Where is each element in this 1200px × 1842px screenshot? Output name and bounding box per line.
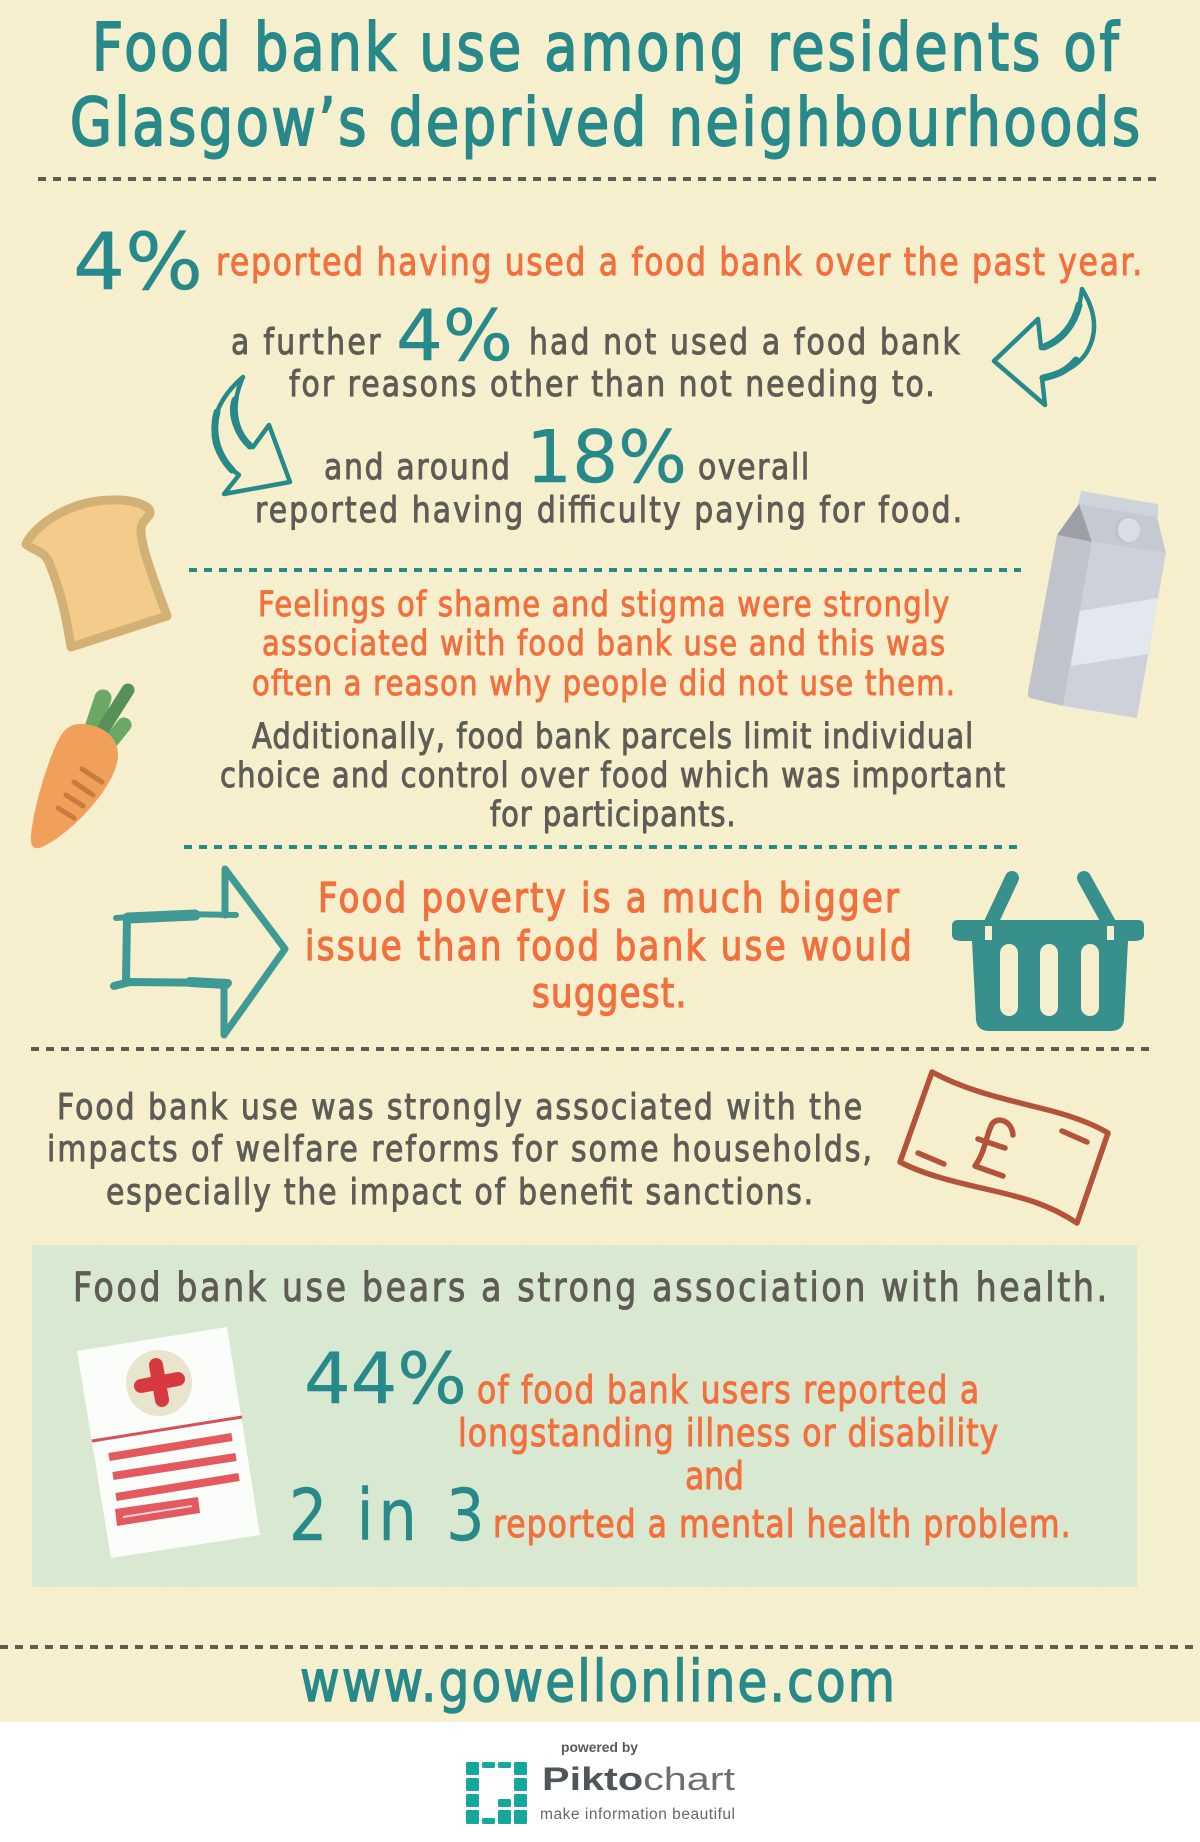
- callout: food poverty: issue than food bank use would: [305, 922, 912, 970]
- stat: 18% difficulty paying: 18%: [526, 415, 687, 499]
- icon: carrot: [31, 690, 128, 848]
- stat: 4% used a food bank: 4%: [73, 218, 203, 308]
- wordmark: Pikto chart: [542, 1761, 735, 1797]
- stat: 4% used a food bank: [73, 218, 1142, 308]
- stat: 44% longstanding illness: longstanding illness or disability: [458, 1412, 998, 1456]
- text: shame and stigma: associated with food bank use and this was: [262, 622, 945, 664]
- icon: Piktochart logo: [466, 1762, 527, 1824]
- text: shame and stigma: often a reason why people did not use them.: [252, 662, 955, 704]
- panel: food bank use statistics: [73, 218, 1142, 531]
- stat: further 4%: [231, 295, 961, 405]
- callout: food poverty: [305, 874, 912, 1017]
- title: Food bank use among residents of: [92, 10, 1120, 86]
- tagline: make information beautiful: [540, 1806, 735, 1823]
- stat: 44% longstanding illness: [304, 1338, 998, 1499]
- stat: 18% difficulty paying: reported having difficulty paying for food.: [255, 488, 962, 531]
- icon: shopping basket: [952, 878, 1144, 1031]
- title: Glasgow’s deprived neighbourhoods: [70, 85, 1140, 161]
- text: shame and stigma: Feelings of shame and stigma were strongly: [258, 583, 949, 625]
- stat: further 4%: had not used a food bank: [529, 320, 961, 363]
- text: parcels limit choice: [220, 715, 1005, 835]
- icon: milk carton: [1028, 492, 1166, 718]
- icon: medical document: [77, 1327, 260, 1558]
- text: welfare reforms: impacts of welfare reforms for some households,: [47, 1127, 872, 1170]
- stat: 44% longstanding illness: of food bank users reported a: [477, 1369, 979, 1413]
- text: parcels limit choice: choice and control over food which was important: [220, 754, 1005, 796]
- arrow: curved pointing down-right: [214, 377, 290, 494]
- stat: 18% difficulty paying: overall: [698, 445, 809, 488]
- stat: 2 in 3 mental health: 2 in 3: [289, 1474, 485, 1557]
- text: shame and stigma: [252, 583, 955, 704]
- website url: www.gowellonline.com: [300, 1649, 895, 1715]
- callout: food poverty: Food poverty is a much bigger: [318, 874, 899, 922]
- stat: 44% longstanding illness: and: [685, 1455, 744, 1499]
- text: welfare reforms: especially the impact of benefit sanctions.: [106, 1170, 813, 1213]
- stat: 4% used a food bank: reported having used a food bank over the past year.: [216, 241, 1142, 285]
- stat: 44% longstanding illness: 44%: [304, 1338, 467, 1420]
- heading: health: Food bank use bears a strong association with health.: [73, 1264, 1107, 1311]
- stat: 18% difficulty paying: [255, 415, 962, 531]
- stat: further 4%: for reasons other than not needing to.: [289, 362, 935, 405]
- stat: 18% difficulty paying: and around: [324, 445, 510, 488]
- stat: further 4%: 4%: [396, 295, 513, 377]
- arrow: curved pointing left-down: [994, 289, 1094, 405]
- title: [70, 10, 1140, 161]
- stat: 2 in 3 mental health: [289, 1474, 1071, 1557]
- footer: powered by Piktochart: [466, 1739, 735, 1824]
- text: welfare reforms: Food bank use was strongly associated with the: [57, 1085, 862, 1128]
- text: parcels limit choice: for participants.: [490, 793, 736, 835]
- arrow: pointing right: [114, 869, 285, 1035]
- icon: pound banknote: [900, 1072, 1108, 1223]
- panel: health association: [32, 1245, 1137, 1587]
- stat: 2 in 3 mental health: reported a mental health problem.: [493, 1503, 1071, 1547]
- callout: food poverty: suggest.: [532, 969, 686, 1017]
- text: welfare reforms: [47, 1085, 872, 1213]
- icon: slice of bread: [26, 500, 167, 647]
- stat: further 4%: a further: [231, 320, 381, 363]
- powered by label: powered by: [561, 1739, 638, 1755]
- text: parcels limit choice: Additionally, food bank parcels limit individual: [252, 715, 973, 757]
